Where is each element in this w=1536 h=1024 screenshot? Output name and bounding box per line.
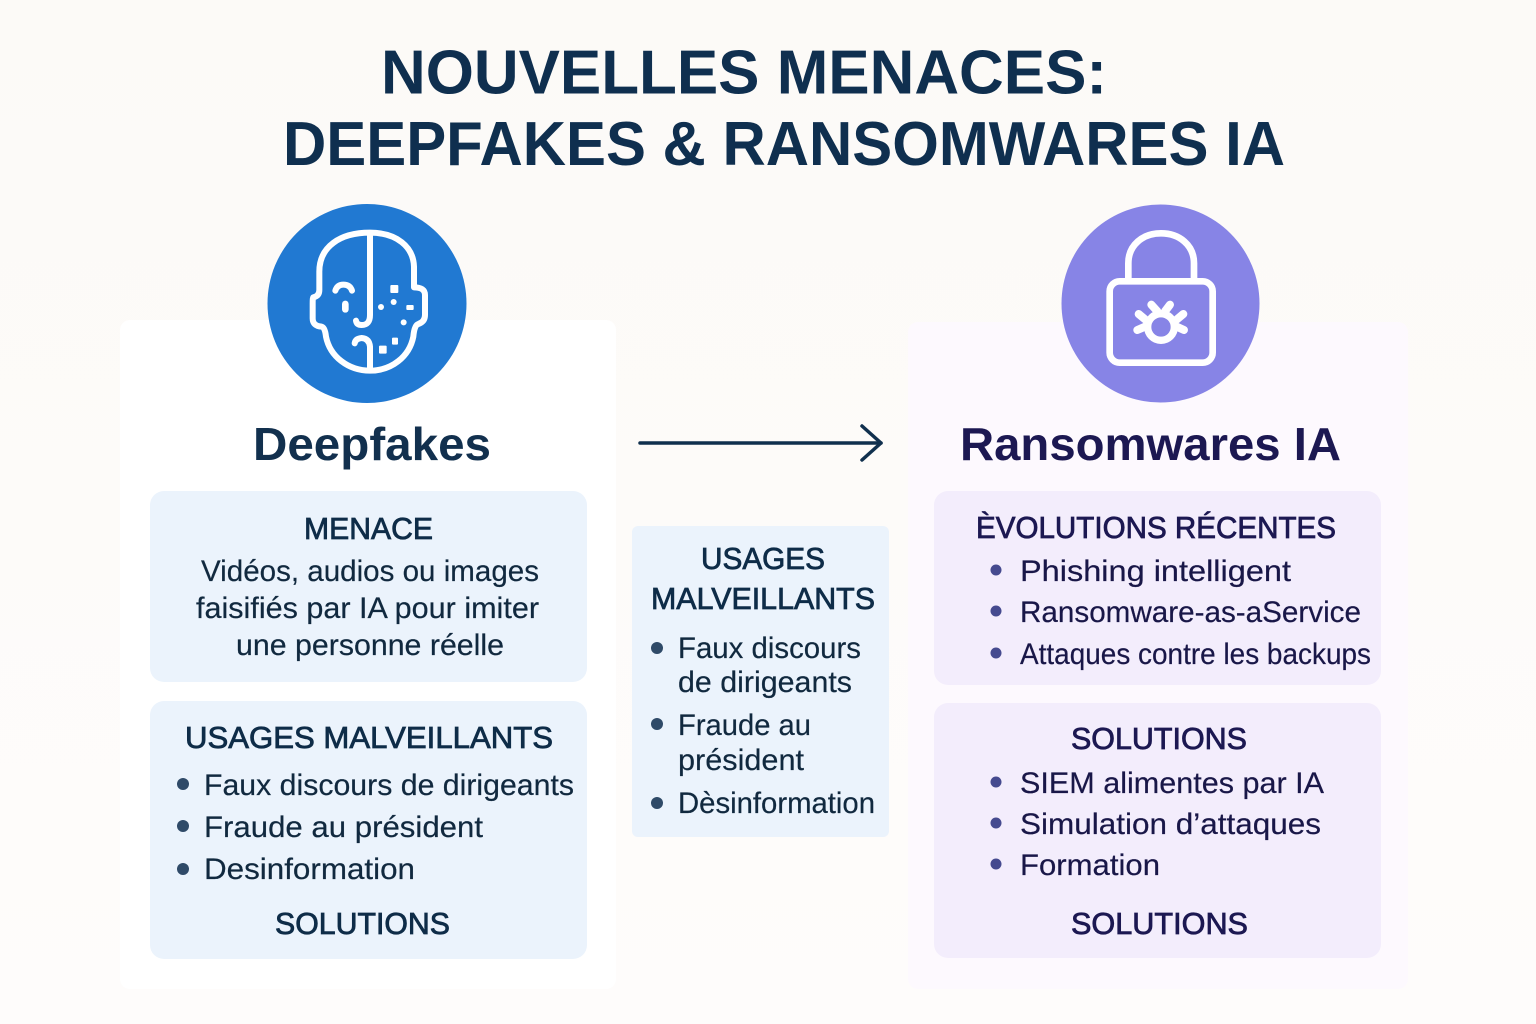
- title: NOUVELLES MENACES:: [381, 38, 1107, 108]
- box: solutions: Simulation d’attaques: [1020, 808, 1321, 841]
- box: menace: [150, 491, 587, 682]
- box: menace: faisifiés par IA pour imiter: [196, 592, 539, 625]
- box: evolutions recentes: ÈVOLUTIONS RÉCENTES: [976, 510, 1336, 545]
- box: usages malveillants center: président: [678, 744, 805, 777]
- panel: deepfakes: [120, 204, 616, 989]
- box: solutions: [934, 703, 1381, 958]
- box: usages malveillants: Fraude au président: [204, 811, 484, 844]
- box: evolutions recentes: Phishing intelligent: [1020, 555, 1292, 588]
- box: usages malveillants: USAGES MALVEILLANTS: [185, 720, 553, 755]
- box: solutions: Formation: [1020, 849, 1160, 882]
- box: menace: MENACE: [304, 511, 433, 546]
- heading: deepfakes: Deepfakes: [253, 418, 491, 470]
- panel: ransomwares: [908, 204, 1408, 989]
- box: usages malveillants center: Faux discours: [678, 632, 861, 665]
- box: solutions: SIEM alimentes par IA: [1020, 767, 1324, 800]
- box: evolutions recentes: Ransomware-as-aService: [1020, 596, 1361, 629]
- box: usages malveillants center: de dirigeants: [678, 666, 852, 699]
- heading: ransomwares IA: Ransomwares IA: [960, 418, 1341, 470]
- title: [283, 38, 1285, 179]
- box: evolutions recentes: [934, 491, 1381, 685]
- box: usages malveillants center: Dèsinformation: [678, 787, 875, 820]
- box: usages malveillants: Desinformation: [204, 853, 415, 886]
- box: solutions: SOLUTIONS: [1071, 906, 1248, 941]
- title: DEEPFAKES & RANSOMWARES IA: [283, 110, 1285, 179]
- box: usages malveillants: Faux discours de dirigeants: [204, 769, 574, 802]
- icon: deepfake face: [268, 204, 466, 403]
- box: menace: Vidéos, audios ou images: [201, 555, 539, 588]
- box: usages malveillants center: USAGES: [701, 541, 825, 576]
- box: solutions: SOLUTIONS: [1071, 721, 1247, 756]
- box: evolutions recentes: Attaques contre les backups: [1020, 638, 1371, 671]
- box: usages malveillants center: Fraude au: [678, 709, 811, 742]
- box: usages malveillants center: MALVEILLANTS: [651, 581, 875, 616]
- icon: padlock with bug: [1062, 204, 1260, 402]
- box: usages malveillants center: [632, 526, 889, 837]
- box: menace: une personne réelle: [236, 629, 504, 662]
- box: usages malveillants: SOLUTIONS: [275, 906, 450, 941]
- arrow: [640, 426, 881, 460]
- box: usages malveillants: [150, 701, 587, 959]
